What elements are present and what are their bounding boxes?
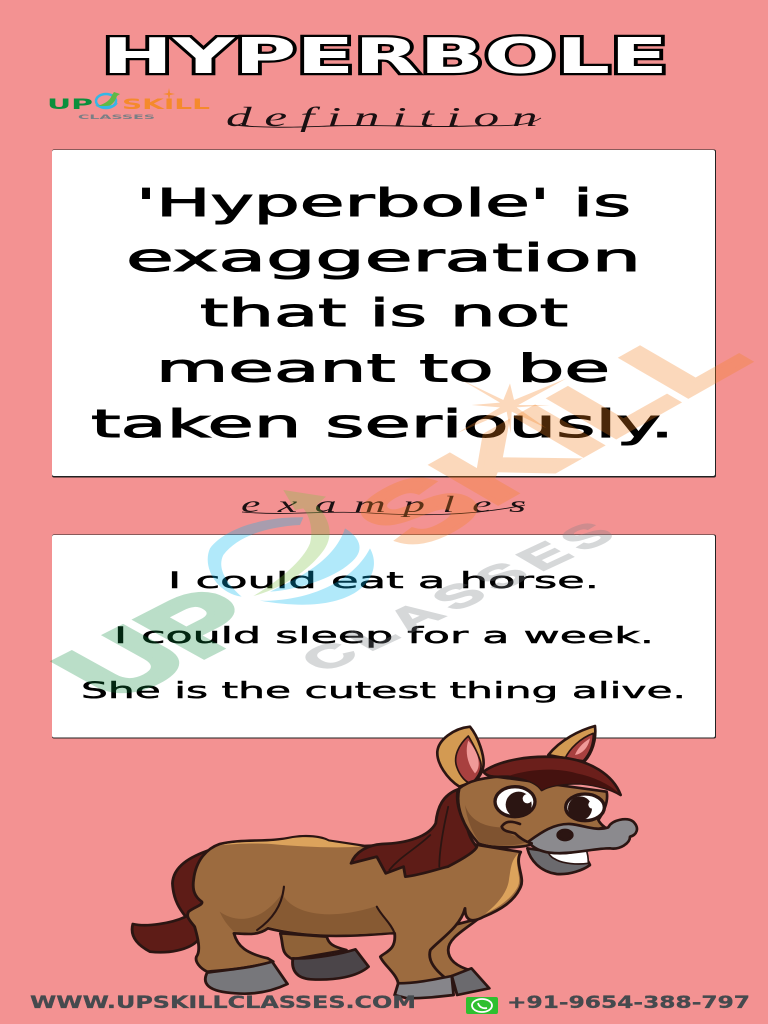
right ear — [548, 726, 595, 761]
forelock — [483, 757, 621, 795]
definition text: taken seriously. — [91, 402, 674, 446]
teeth — [548, 849, 588, 864]
definition text: that is not — [200, 291, 568, 335]
heading: definition: definition — [226, 102, 538, 132]
icon: whatsapp — [466, 997, 498, 1014]
lower jaw — [527, 848, 590, 874]
forelock shadow — [508, 770, 620, 794]
definition text — [91, 181, 674, 446]
muscle lines — [257, 887, 395, 933]
head shading — [465, 805, 528, 846]
examples text — [81, 568, 686, 704]
body — [188, 836, 522, 984]
watermark: upskill classes: UP — [28, 574, 293, 714]
panel: definition — [52, 150, 716, 478]
logo: upskill classes: UP — [47, 97, 93, 113]
examples text: I could eat a horse. — [168, 568, 599, 594]
near hooves — [205, 962, 454, 998]
examples text: She is the cutest thing alive. — [81, 678, 686, 704]
footer: website: WWW.UPSKILLCLASSES.COM — [30, 993, 416, 1012]
left eye — [495, 787, 535, 818]
watermark: upskill classes: SKILL — [325, 309, 768, 564]
watermark: upskill classes: CLASSES — [288, 515, 626, 678]
far hind leg — [280, 933, 369, 980]
definition text: 'Hyperbole' is — [136, 181, 631, 225]
definition text: exaggeration — [126, 236, 641, 280]
logo: upskill classes: SKILL — [122, 97, 210, 113]
smile line — [502, 822, 532, 843]
tail — [132, 849, 211, 952]
mane strands — [389, 807, 448, 870]
panel: examples — [52, 534, 716, 738]
body shading — [220, 837, 519, 934]
horse head — [437, 726, 637, 874]
muzzle — [528, 819, 637, 853]
watermark: upskill classes — [28, 309, 768, 714]
examples text: I could sleep for a week. — [114, 623, 654, 649]
horse body and legs — [132, 789, 522, 998]
neck mane — [351, 789, 477, 877]
nostril — [558, 830, 572, 840]
heading: examples: examples — [241, 492, 526, 517]
title: HYPERBOLE — [102, 28, 668, 85]
logo: upskill classes: CLASSES — [78, 113, 156, 121]
definition text: meant to be — [156, 346, 610, 390]
left ear — [437, 727, 484, 787]
right eye — [566, 794, 604, 821]
head shape — [458, 777, 607, 847]
footer: phone number: +91-9654-388-797 — [507, 993, 750, 1012]
illustration: horse — [132, 726, 637, 998]
logo: upskill classes — [47, 88, 210, 121]
far front leg — [421, 919, 489, 995]
